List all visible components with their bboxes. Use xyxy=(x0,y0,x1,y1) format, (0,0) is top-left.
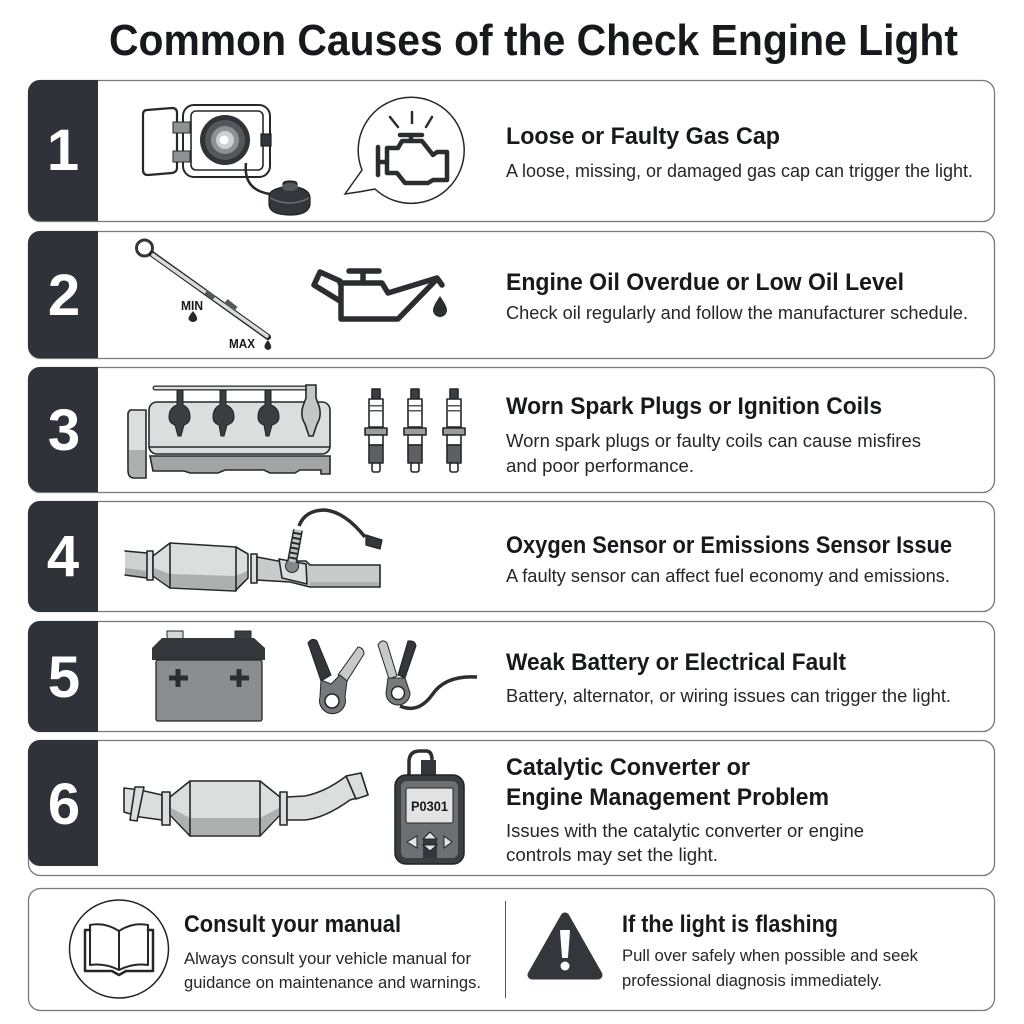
icon: fuel door with gas cap xyxy=(143,105,310,215)
heading 6: Catalytic Converter or xyxy=(506,754,750,781)
number tab 6: 6 xyxy=(48,772,80,837)
description 3 xyxy=(506,431,921,476)
panel: bottom notes xyxy=(28,888,994,1010)
number tab 3 xyxy=(28,367,98,492)
text: flashing description: professional diagnosis immediately. xyxy=(622,971,882,990)
description 6: Issues with the catalytic converter or engine xyxy=(506,821,864,841)
panel: cause 2 engine oil xyxy=(28,231,994,358)
icon: dipstick: MAX xyxy=(229,336,255,351)
icon: dipstick: MIN xyxy=(181,298,203,313)
number tab 5 xyxy=(28,621,98,732)
icon: car battery xyxy=(152,631,265,721)
heading: consult your manual: Consult your manual xyxy=(184,911,401,938)
number tab 5: 5 xyxy=(48,645,80,710)
number tab 6 xyxy=(28,740,98,866)
icon: check engine speech bubble xyxy=(345,97,464,203)
description 3: and poor performance. xyxy=(506,456,694,476)
icon: OBD scanner P0301: P0301 xyxy=(411,798,448,814)
panel: cause 1 gas cap xyxy=(28,80,994,222)
icon: open manual book xyxy=(70,900,168,998)
panel: cause 4 oxygen sensor xyxy=(28,501,994,612)
number tab 4 xyxy=(28,501,98,612)
number tab 2 xyxy=(28,231,98,358)
text: consult manual description: guidance on maintenance and warnings. xyxy=(184,973,481,992)
panel: cause 5 battery xyxy=(28,621,994,732)
text: consult manual description xyxy=(184,949,481,992)
number tab 1: 1 xyxy=(47,118,79,183)
icon: dipstick xyxy=(136,240,271,351)
heading 3: Worn Spark Plugs or Ignition Coils xyxy=(506,393,882,420)
icon: exhaust pipe with oxygen sensor xyxy=(125,510,382,591)
heading 6: Engine Management Problem xyxy=(506,784,829,811)
description 1: A loose, missing, or damaged gas cap can trigger the light. xyxy=(506,161,973,181)
number tab 4: 4 xyxy=(47,524,79,589)
icon: catalytic converter xyxy=(124,773,368,836)
description 5: Battery, alternator, or wiring issues can trigger the light. xyxy=(506,686,951,706)
heading 2: Engine Oil Overdue or Low Oil Level xyxy=(506,269,904,296)
icon: oil can xyxy=(314,271,447,319)
description 3: Worn spark plugs or faulty coils can cause misfires xyxy=(506,431,921,451)
heading: light flashing: If the light is flashing xyxy=(622,911,838,938)
title: Common Causes of the Check Engine Light xyxy=(109,16,958,65)
icon: jumper clamps xyxy=(308,639,477,714)
icon: engine with ignition coils xyxy=(128,385,330,478)
text: consult manual description: Always consult your vehicle manual for xyxy=(184,949,471,968)
heading 6 xyxy=(506,754,829,811)
description 4: A faulty sensor can affect fuel economy and emissions. xyxy=(506,566,950,586)
number tab 2: 2 xyxy=(48,263,80,328)
heading 4: Oxygen Sensor or Emissions Sensor Issue xyxy=(506,532,952,559)
text: flashing description xyxy=(622,946,918,990)
description 6 xyxy=(506,821,864,865)
panel: cause 6 catalytic converter xyxy=(28,740,994,876)
text: flashing description: Pull over safely when possible and seek xyxy=(622,946,918,965)
description 6: controls may set the light. xyxy=(506,845,718,865)
icon: spark plugs xyxy=(365,389,465,472)
icon: OBD scanner P0301 xyxy=(395,751,464,864)
panel: cause 3 spark plugs xyxy=(28,367,994,492)
heading 1: Loose or Faulty Gas Cap xyxy=(506,123,780,150)
number tab 3: 3 xyxy=(48,398,80,463)
heading 5: Weak Battery or Electrical Fault xyxy=(506,649,846,676)
description 2: Check oil regularly and follow the manufacturer schedule. xyxy=(506,303,968,323)
number tab 1 xyxy=(28,80,98,221)
icon: warning triangle xyxy=(532,917,598,975)
